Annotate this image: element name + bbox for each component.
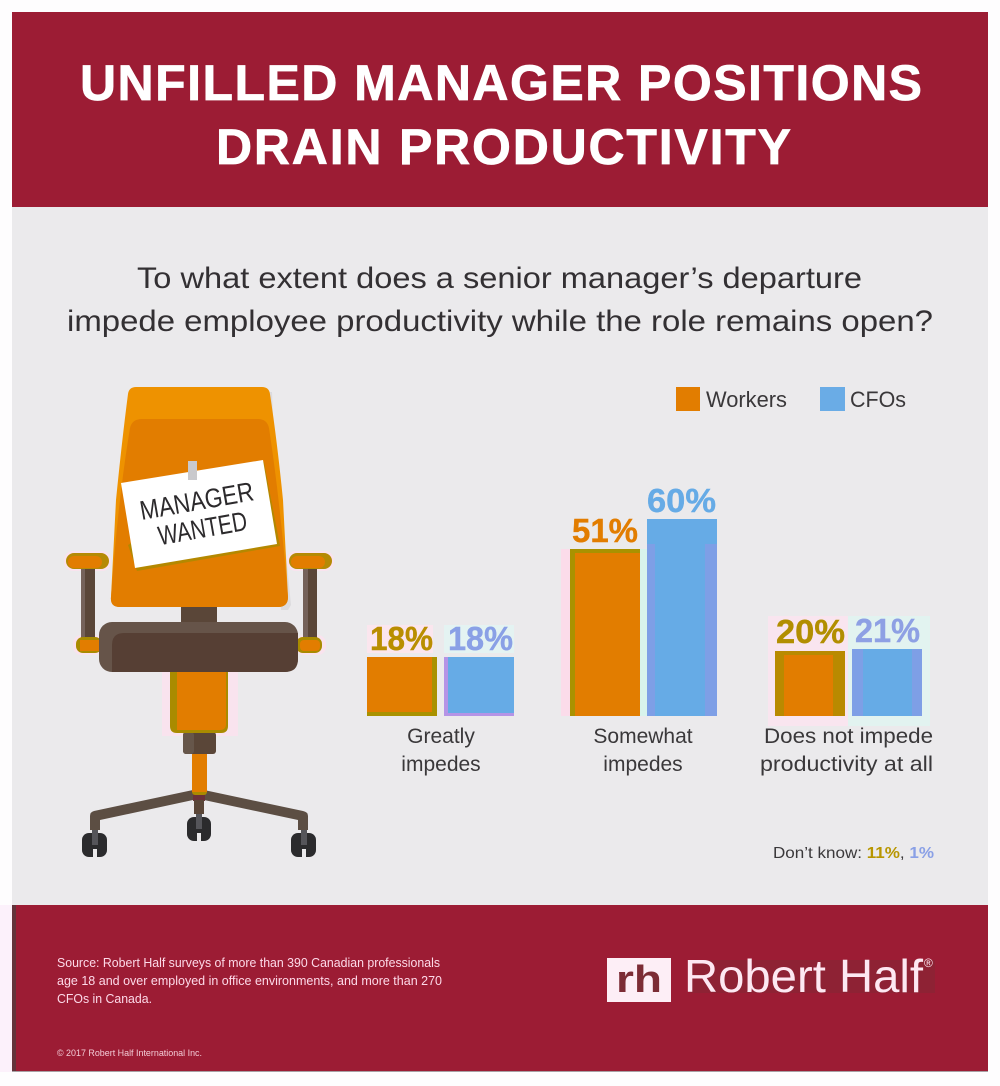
sign text: [138, 476, 261, 554]
title: DRAIN PRODUCTIVITY: [216, 119, 791, 175]
sign: [121, 460, 277, 568]
chair shadow: [270, 392, 291, 610]
title: [80, 55, 922, 175]
question heading: impede employee productivity while the role remains open?: [67, 305, 933, 338]
group: somewhat impedes: impedes: [603, 753, 683, 776]
don't know note: Don’t know: 11%, 1%: [773, 845, 934, 862]
armrests: [66, 553, 332, 653]
panel: gray body: [12, 207, 988, 905]
tape: [188, 461, 197, 480]
panel: footer: [12, 905, 988, 1072]
source text: age 18 and over employed in office environments, and more than 270: [57, 974, 442, 988]
title: UNFILLED MANAGER POSITIONS: [80, 55, 922, 111]
source text: CFOs in Canada.: [57, 992, 152, 1006]
backrest: [111, 387, 288, 607]
sign text: WANTED: [156, 506, 250, 551]
chair halo: [64, 551, 334, 736]
group: does not impede: 21%: [855, 612, 920, 649]
sign text: MANAGER: [138, 476, 256, 526]
group: somewhat impedes: 51%: [572, 512, 638, 549]
group: does not impede: [760, 612, 933, 776]
group: does not impede: productivity at all: [760, 753, 933, 776]
source text: [57, 956, 442, 1006]
seat: [99, 622, 298, 672]
logo: Robert Half: Robert Half: [684, 950, 923, 1002]
legend: Workers: [706, 387, 787, 412]
group: greatly impedes: 18%: [448, 620, 513, 657]
source text: Source: Robert Half surveys of more than 390 Canadian professionals: [57, 956, 440, 970]
group: greatly impedes: impedes: [401, 753, 481, 776]
legend: CFOs: [850, 387, 906, 412]
logo: Robert Half: rh: [616, 959, 662, 1001]
chair legs: [90, 788, 308, 830]
group: somewhat impedes: Somewhat: [593, 725, 693, 748]
upper column: [170, 672, 228, 733]
copyright: © 2017 Robert Half International Inc.: [57, 1048, 202, 1058]
icon: office chair with sign: [64, 387, 334, 858]
casters: [82, 814, 316, 858]
neck: [181, 605, 217, 624]
panel: title banner: [12, 12, 988, 207]
lower column: [183, 732, 216, 754]
bar chart: [367, 482, 933, 776]
gas rod: [192, 754, 207, 795]
group: does not impede: Does not impede: [764, 725, 933, 748]
logo: Robert Half: ®: [924, 956, 933, 970]
arm posts: [81, 569, 317, 639]
question heading: [67, 262, 933, 338]
group: greatly impedes: [367, 620, 514, 776]
sign shadow: [128, 462, 280, 571]
question heading: To what extent does a senior manager’s departure: [137, 262, 862, 295]
legend: [676, 387, 906, 412]
group: greatly impedes: 18%: [370, 620, 433, 657]
group: does not impede: 20%: [776, 613, 845, 650]
group: somewhat impedes: 60%: [647, 482, 716, 519]
group: greatly impedes: Greatly: [407, 725, 475, 748]
group: somewhat impedes: [561, 482, 717, 776]
